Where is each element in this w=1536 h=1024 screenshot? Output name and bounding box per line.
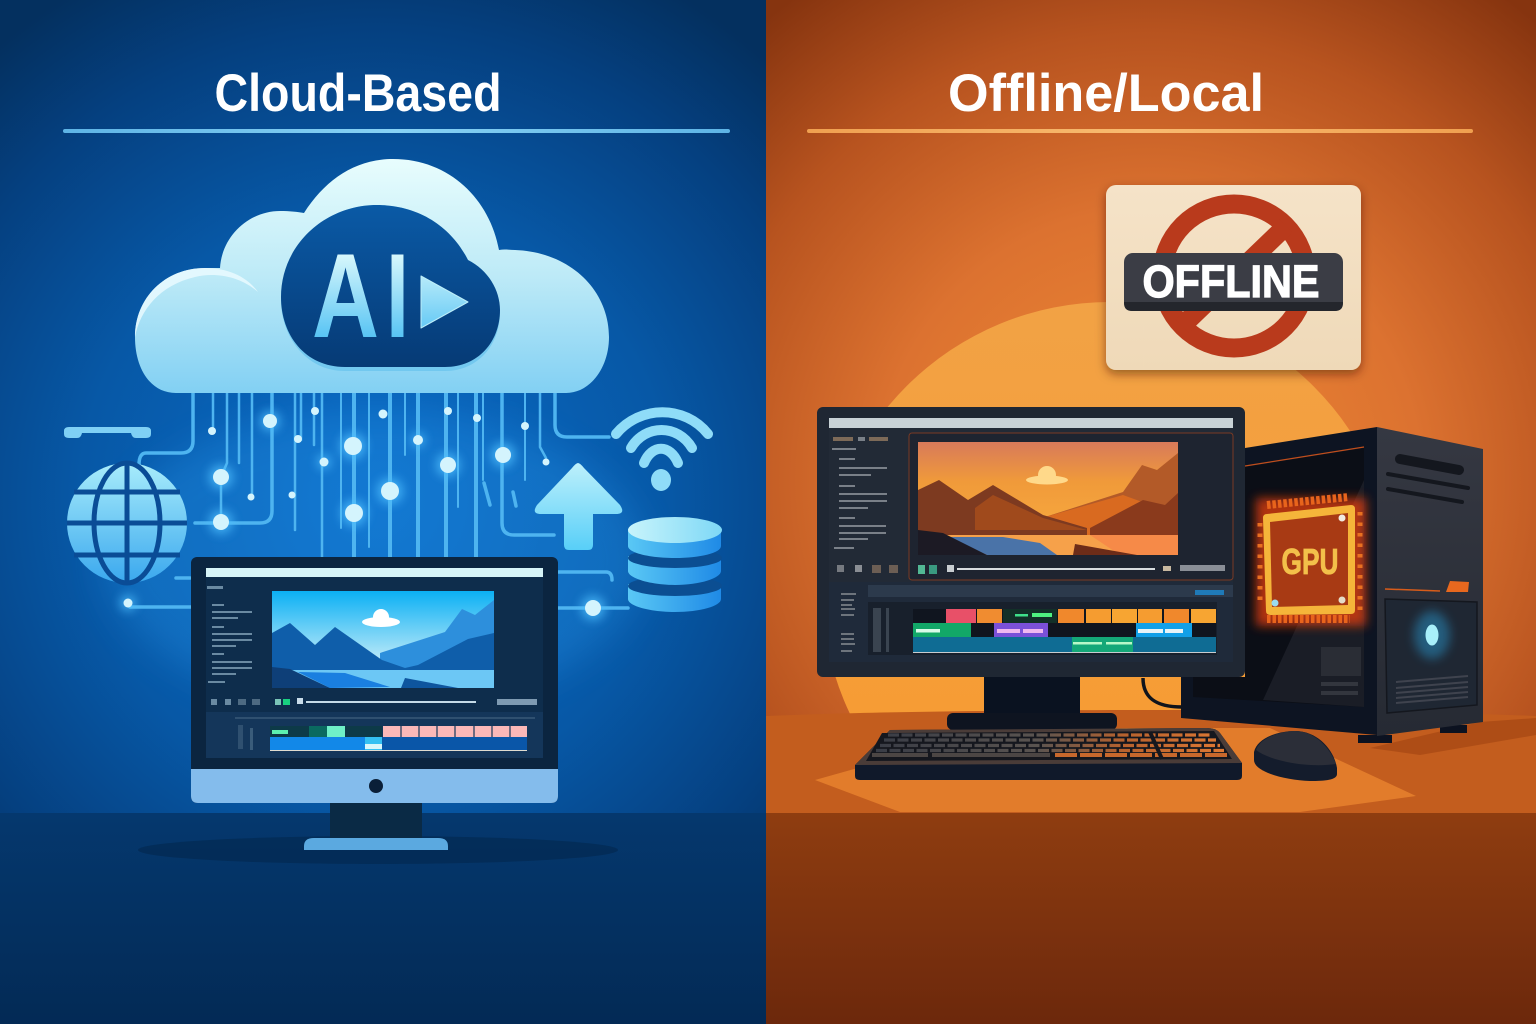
monitor stand bbox=[984, 676, 1080, 714]
heading rule: cloud bbox=[63, 129, 730, 133]
monitor body bbox=[817, 407, 1245, 677]
icon: database bbox=[628, 517, 722, 612]
timeline bbox=[235, 717, 535, 751]
desk highlight bbox=[815, 728, 1416, 812]
preview window bbox=[272, 591, 494, 688]
node glows bbox=[120, 411, 605, 620]
desk surface bbox=[766, 710, 1536, 813]
icon: globe bbox=[67, 463, 187, 583]
monitor: cloud bbox=[138, 557, 618, 864]
keyboard bbox=[855, 728, 1242, 780]
screen UI bbox=[206, 568, 543, 577]
sun behind computer bbox=[836, 302, 1350, 714]
tower front bbox=[1377, 427, 1483, 736]
monitor glow bbox=[105, 410, 645, 710]
data circuit lines bbox=[130, 393, 628, 608]
preview frame bbox=[909, 433, 1233, 580]
transport bar bbox=[837, 565, 1225, 574]
power LED bbox=[1414, 611, 1450, 659]
heading rule: local bbox=[807, 129, 1473, 133]
monitor: local bbox=[817, 407, 1245, 730]
monitor body bbox=[191, 557, 558, 803]
sidebar list bbox=[207, 586, 252, 683]
preview image bbox=[918, 442, 1178, 555]
icon: upload arrow bbox=[535, 463, 622, 550]
heading: Offline/Local: Offline/Local bbox=[948, 64, 1264, 123]
heading: Cloud-Based: Cloud-Based bbox=[214, 64, 502, 123]
icon: wifi bbox=[616, 412, 708, 491]
monitor shadow bbox=[138, 836, 618, 864]
floor: cloud side bbox=[0, 813, 766, 1024]
badge text: OFFLINE bbox=[1142, 256, 1320, 307]
panel: cloud-based bbox=[0, 0, 766, 1024]
sidebar list bbox=[832, 437, 888, 549]
icon: play triangle bbox=[421, 276, 468, 328]
icon: AI cloud bbox=[135, 159, 609, 393]
badge: offline bbox=[1106, 185, 1361, 370]
tower vents bbox=[1388, 459, 1468, 502]
orange accent bbox=[1385, 581, 1469, 592]
tower floor shadow bbox=[1370, 718, 1536, 755]
lower panel bbox=[1385, 599, 1477, 713]
connector bar bbox=[64, 427, 151, 438]
transport bar bbox=[211, 698, 537, 705]
icon text: AI: A bbox=[312, 229, 379, 363]
cable bbox=[1143, 678, 1182, 707]
panel: offline/local bbox=[766, 0, 1536, 1024]
timeline bbox=[829, 582, 1233, 662]
data nodes bbox=[124, 407, 601, 616]
mouse bbox=[1254, 731, 1337, 781]
chip: GPU bbox=[1256, 497, 1366, 626]
icon text: AI: I bbox=[386, 229, 409, 363]
monitor stand bbox=[330, 802, 422, 838]
chip label: GPU bbox=[1282, 541, 1338, 582]
tower side bbox=[1181, 427, 1377, 735]
PC tower bbox=[1181, 427, 1483, 743]
tower feet bbox=[1358, 725, 1467, 743]
floor: local side bbox=[766, 813, 1536, 1024]
